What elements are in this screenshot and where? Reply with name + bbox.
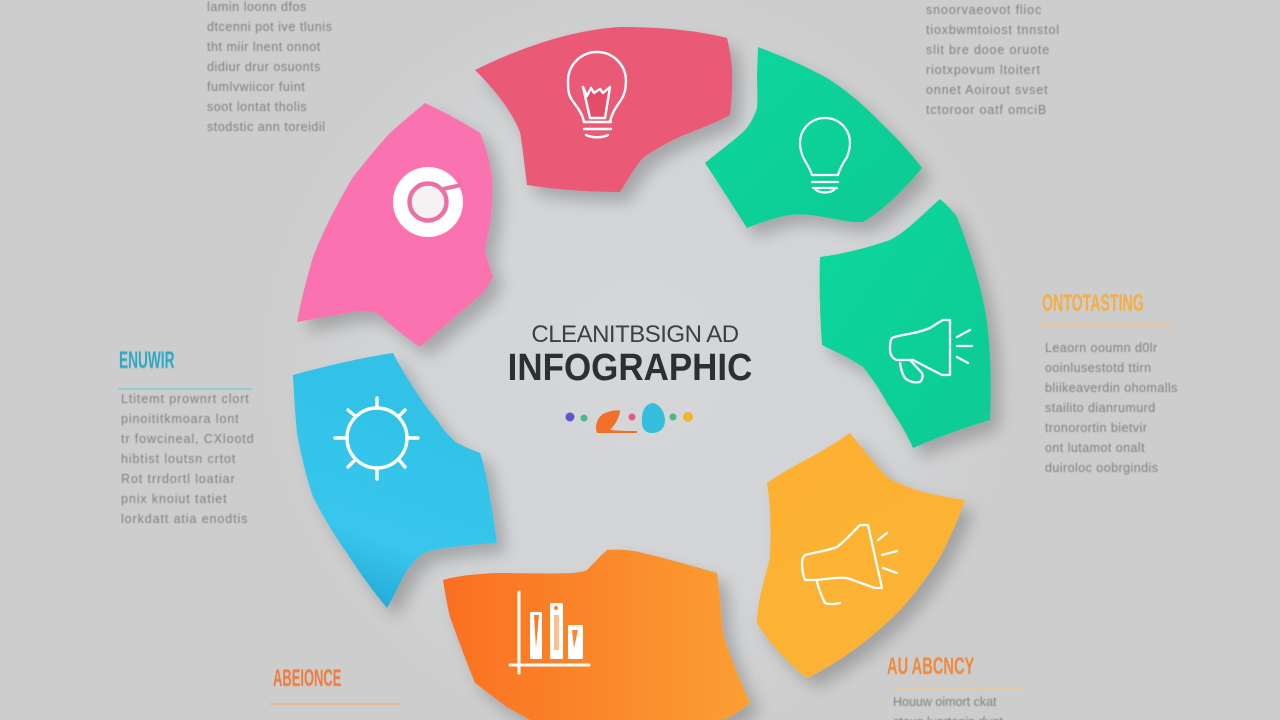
icon: megaphone outline bbox=[802, 525, 897, 604]
text block: top right: riotxpovum ltoitert bbox=[926, 63, 1041, 77]
heading: orange: ONTOTASTING bbox=[1042, 290, 1144, 317]
text block: top left: dtcenni pot ive tlunis bbox=[207, 20, 332, 34]
heading: orange red: ABEIONCE bbox=[273, 665, 341, 692]
text block: left: Rot trrdortl loatiar bbox=[121, 472, 236, 486]
icon: sun bbox=[335, 398, 418, 479]
text block: top right: tioxbwmtoiost tnnstol bbox=[926, 23, 1060, 37]
title: CLEANITBSIGN AD bbox=[531, 321, 739, 348]
text block: right: stailito dianrumurd bbox=[1045, 401, 1156, 415]
segment: yellow with megaphone bbox=[757, 433, 965, 678]
text block: top right: onnet Aoirout svset bbox=[926, 83, 1048, 97]
central disc bbox=[260, 0, 1020, 720]
text block: bottom right bbox=[893, 695, 1003, 720]
text block: top left: fumlvwiicor fuint bbox=[207, 80, 305, 94]
text block: top right bbox=[926, 3, 1060, 117]
heading: blue: ENUWIR bbox=[119, 347, 174, 374]
segment: green with megaphone bbox=[820, 199, 991, 448]
text block: left: hibtist loutsn crtot bbox=[121, 452, 236, 466]
text block: right: ooinlusestotd ttirn bbox=[1045, 361, 1152, 375]
text block: top left: soot lontat tholis bbox=[207, 100, 307, 114]
text block: bottom right: Houuw oimort ckat bbox=[893, 695, 997, 709]
text block: right: Leaorn ooumn d0lr bbox=[1045, 341, 1158, 355]
text block: left: pnix knoiut tatiet bbox=[121, 492, 228, 506]
text block: right bbox=[1044, 341, 1178, 475]
text block: right: tronorortin bietvir bbox=[1045, 421, 1147, 435]
text block: top left: lamin loonn dfos bbox=[207, 0, 307, 14]
segment: red with bulb bbox=[475, 27, 732, 192]
text block: top right: snoorvaeovot flioc bbox=[926, 3, 1042, 17]
text block: right: duiroloc oobrgindis bbox=[1045, 461, 1158, 475]
label: bottom right bbox=[887, 655, 1024, 720]
text block: top right: tctoroor oatf omciB bbox=[926, 103, 1047, 117]
text block: right: ont lutamot onalt bbox=[1045, 441, 1145, 455]
text block: left: tr fowcineal, CXlootd bbox=[121, 432, 255, 446]
icon: bar chart bbox=[510, 592, 589, 673]
icon: megaphone bbox=[890, 320, 972, 382]
text block: left bbox=[120, 392, 255, 526]
text block: right: bliikeaverdin ohomalls bbox=[1045, 381, 1178, 395]
text block: top right: slit bre dooe oruote bbox=[926, 43, 1050, 57]
title bbox=[508, 321, 752, 389]
icon: target bbox=[393, 167, 463, 237]
text block: top left: tht miir lnent onnot bbox=[207, 40, 321, 54]
text block: top left bbox=[206, 0, 332, 134]
label: right column bbox=[1040, 290, 1178, 475]
segment: pink with target bbox=[297, 103, 493, 347]
segment: green with bulb bbox=[705, 47, 922, 228]
text block: left: lorkdatt atia enodtis bbox=[121, 512, 248, 526]
icon: light bulb with filament bbox=[568, 52, 626, 137]
label: left column bbox=[118, 347, 255, 526]
segment: blue with sun icon bbox=[293, 353, 497, 608]
text block: top left: didiur drur osuonts bbox=[207, 60, 321, 74]
text block: left: Ltitemt prownrt clort bbox=[121, 392, 250, 406]
text block: left: pinoititkmoara lont bbox=[121, 412, 240, 426]
title: INFOGRAPHIC bbox=[508, 347, 752, 389]
segment: orange with bar chart bbox=[443, 550, 750, 720]
text block: top left: stodstic ann toreidil bbox=[207, 120, 326, 134]
icon: bulb outline bbox=[800, 118, 850, 192]
centre decoration: coloured dots bbox=[566, 403, 693, 433]
